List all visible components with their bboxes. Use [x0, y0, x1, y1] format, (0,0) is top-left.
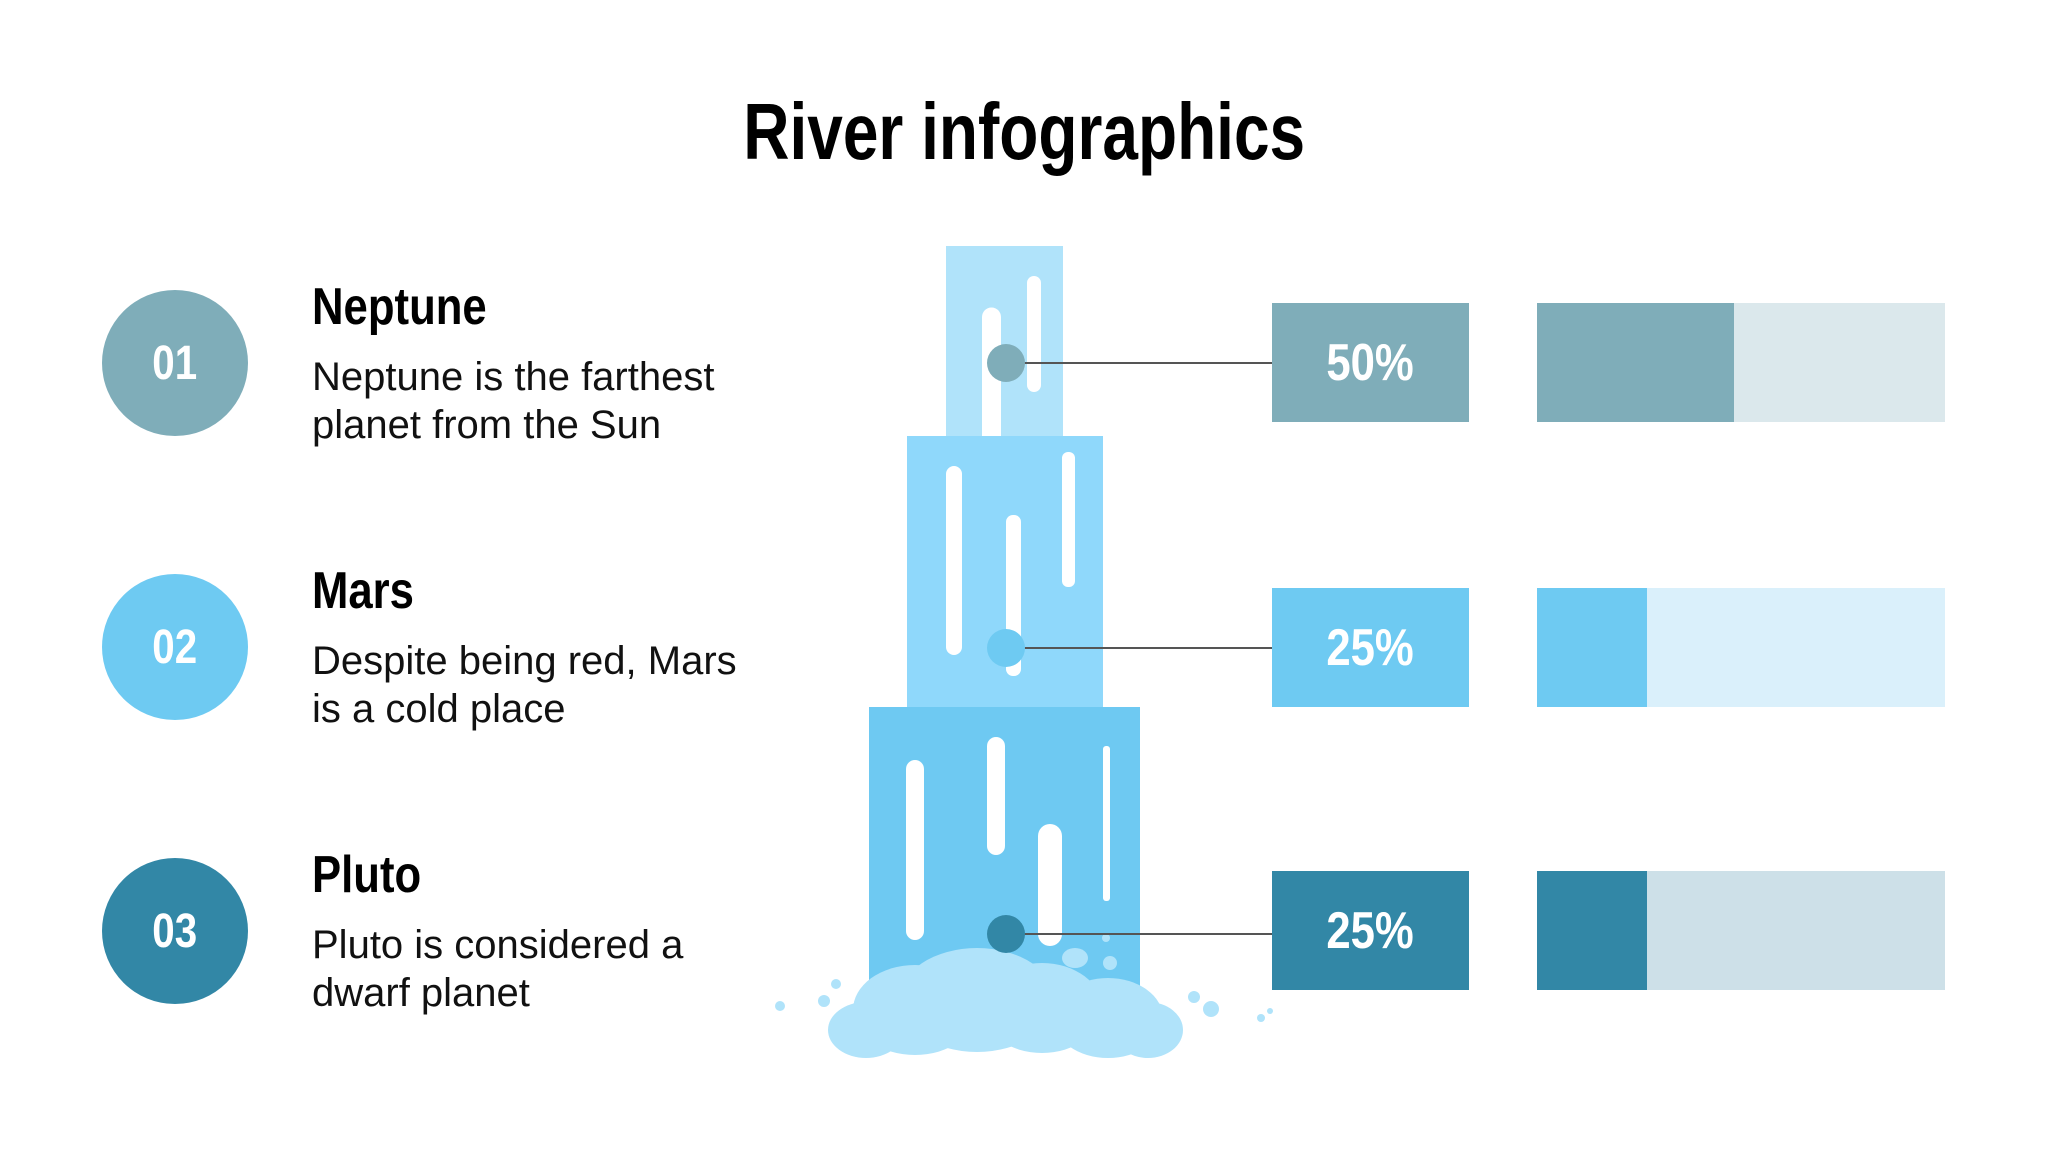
text Neptune — [312, 355, 714, 447]
progress bar 1 — [1537, 303, 1945, 422]
percent box 50%: 50% — [1327, 334, 1414, 392]
marker dots — [987, 344, 1025, 953]
text Mars — [312, 639, 737, 731]
connector lines — [1006, 363, 1273, 934]
heading Pluto: Pluto — [312, 846, 421, 904]
circle 02 — [102, 574, 248, 720]
title: River infographics — [743, 87, 1305, 176]
text Neptune: planet from the Sun — [312, 403, 661, 447]
heading Neptune: Neptune — [312, 278, 487, 336]
text Mars: is a cold place — [312, 687, 565, 731]
text Pluto — [312, 923, 684, 1015]
percent box 25% dark: 25% — [1327, 902, 1414, 960]
circle 01: 01 — [153, 336, 197, 390]
percent box 50% — [1272, 303, 1469, 422]
circle 02: 02 — [153, 620, 197, 674]
circle 01 — [102, 290, 248, 436]
progress bar 2 — [1537, 588, 1945, 707]
foam — [775, 934, 1273, 1058]
text Mars: Despite being red, Mars — [312, 639, 737, 683]
percent box 25% dark — [1272, 871, 1469, 990]
heading Mars: Mars — [312, 562, 414, 620]
progress bar 3 — [1537, 871, 1945, 990]
circle 03: 03 — [153, 904, 197, 958]
text Pluto: Pluto is considered a — [312, 923, 683, 967]
text Pluto: dwarf planet — [312, 971, 530, 1015]
percent box 25%: 25% — [1327, 618, 1414, 676]
text Neptune: Neptune is the farthest — [312, 355, 714, 399]
circle 03 — [102, 858, 248, 1004]
waterfall blocks — [869, 246, 1140, 1007]
percent box 25% — [1272, 588, 1469, 707]
